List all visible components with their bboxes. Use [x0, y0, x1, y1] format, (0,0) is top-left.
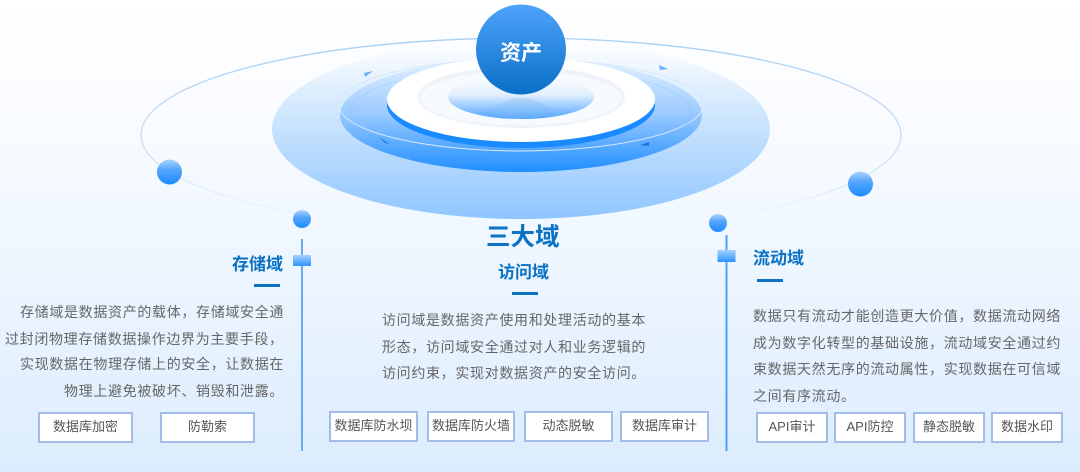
text block: storage description: 实现数据在物理存储上的安全，让数据在	[20, 356, 284, 372]
text block: flow description: 成为数字化转型的基础设施，流动域安全通过约	[753, 335, 1061, 351]
big orbit ring	[141, 38, 901, 232]
text block: storage description: 存储域是数据资产的载体，存储域安全通	[20, 304, 284, 320]
innermost gradient disc	[448, 75, 594, 119]
tag: API control: API防控	[847, 419, 893, 434]
tag: static masking	[913, 412, 985, 443]
heading: flow domain: 流动域	[753, 249, 804, 268]
heading underline	[254, 284, 280, 287]
tag: database audit: 数据库审计	[632, 418, 697, 433]
text block: flow description: 之间有序流动。	[753, 388, 856, 404]
right timeline	[718, 235, 736, 451]
heading: storage domain: 存储域	[232, 255, 283, 274]
small orbit sphere right upper	[848, 172, 873, 196]
thin rotation rings with arrows	[339, 59, 703, 159]
text block: access description: 访问约束，实现对数据资产的安全访问。	[382, 365, 646, 381]
inner ring	[417, 66, 625, 128]
text block: access description	[382, 312, 646, 381]
text block: storage description	[5, 304, 284, 399]
panel: storage domain	[5, 255, 284, 443]
text block: flow description: 束数据天然无序的流动属性，实现数据在可信域	[753, 361, 1061, 377]
text block: flow description: 数据只有流动才能创造更大价值，数据流动网络	[753, 308, 1061, 324]
tag: database encryption: 数据库加密	[53, 419, 118, 434]
white platform disc	[387, 57, 655, 148]
connector sphere left	[293, 210, 311, 228]
title: 三大域	[486, 224, 560, 251]
tag: database audit	[620, 411, 709, 442]
text block: storage description: 过封闭物理存储数据操作边界为主要手段，	[5, 331, 284, 347]
tag: API audit	[756, 412, 828, 443]
text block: flow description	[753, 308, 1061, 404]
left timeline	[293, 239, 311, 451]
panel: access domain	[329, 263, 709, 442]
outer disc	[272, 39, 770, 219]
middle blue disc	[340, 58, 702, 172]
text block: access description: 形态，访问域安全通过对人和业务逻辑的	[382, 339, 646, 355]
text block: access description: 访问域是数据资产使用和处理活动的基本	[382, 312, 646, 328]
heading underline	[512, 292, 538, 295]
text block: storage description: 物理上避免被破坏、销毁和泄露。	[64, 383, 284, 399]
heading: access domain: 访问域	[498, 263, 549, 282]
small orbit sphere left upper	[157, 160, 182, 184]
tag: anti ransomware: 防勒索	[188, 419, 227, 434]
tag: static masking: 静态脱敏	[923, 419, 975, 434]
tag: API audit: API审计	[769, 419, 815, 434]
tag: database encryption	[38, 412, 133, 443]
heading underline	[757, 279, 783, 282]
tag: database firewall	[427, 411, 515, 442]
tag: database dam	[329, 411, 418, 442]
connector sphere right	[709, 214, 727, 232]
tag: data watermark	[991, 412, 1063, 443]
tag: database firewall: 数据库防火墙	[432, 418, 510, 433]
panel: flow domain	[753, 249, 1063, 443]
tag: anti ransomware	[160, 412, 255, 443]
asset sphere: 资产	[500, 42, 542, 65]
tag: API control	[834, 412, 906, 443]
tag: dynamic masking	[524, 411, 613, 442]
tag: data watermark: 数据水印	[1001, 419, 1053, 434]
tag: database dam: 数据库防水坝	[334, 418, 412, 433]
asset sphere	[476, 4, 566, 94]
tag: dynamic masking: 动态脱敏	[542, 418, 594, 433]
